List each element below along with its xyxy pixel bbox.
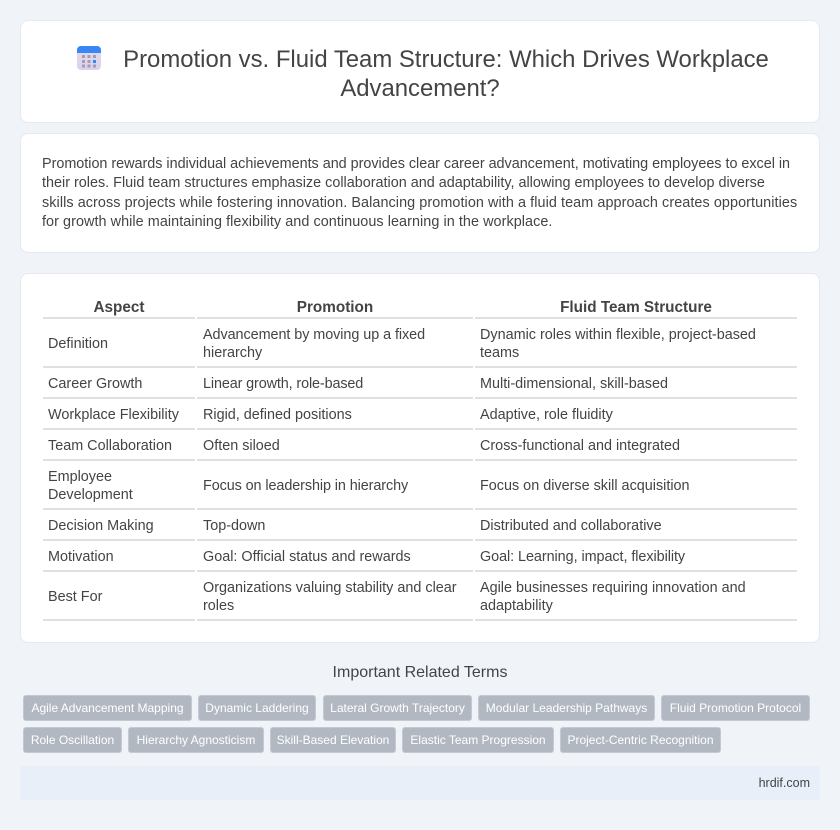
intro text: skills across projects while fostering innovation. Balancing promotion with a fluid team approach creates opportunities [42,195,797,211]
header card [20,20,820,123]
comparison table: Goal: Official status and rewards [203,549,411,565]
comparison table: Linear growth, role-based [203,376,363,392]
footer bar [20,766,820,800]
comparison table: teams [480,345,519,361]
comparison table: Advancement by moving up a fixed [203,327,425,343]
footer source: hrdif.com [759,776,810,790]
related term chips: Skill-Based Elevation [277,733,389,747]
intro text [42,156,797,230]
comparison table: Fluid Team Structure [560,299,712,316]
comparison table: Often siloed [203,438,280,454]
comparison table: Focus on diverse skill acquisition [480,478,690,494]
comparison table panel [20,273,820,643]
related terms heading: Important Related Terms [333,664,507,681]
comparison table: Agile businesses requiring innovation and [480,580,746,596]
related term chips: Lateral Growth Trajectory [330,701,465,715]
related term chips: Agile Advancement Mapping [31,701,184,715]
comparison table: Rigid, defined positions [203,407,352,423]
comparison table: Goal: Learning, impact, flexibility [480,549,685,565]
comparison table: Organizations valuing stability and clear [203,580,457,596]
title [123,46,769,102]
related term chips: Elastic Team Progression [410,733,546,747]
intro text: their roles. Fluid team structures emphasize collaboration and adaptability, allowing employees to develop diverse [42,175,765,191]
comparison table: Workplace Flexibility [48,407,179,423]
intro panel [20,133,820,253]
related term chips: Fluid Promotion Protocol [670,701,801,715]
comparison table: Definition [48,336,108,352]
comparison table: Team Collaboration [48,438,172,454]
related term chips: Modular Leadership Pathways [486,701,647,715]
comparison table: Dynamic roles within flexible, project-based [480,327,756,343]
comparison table: Distributed and collaborative [480,518,662,534]
comparison table: Cross-functional and integrated [480,438,680,454]
related term chips: Project-Centric Recognition [567,733,714,747]
comparison table: Motivation [48,549,114,565]
comparison table [43,299,797,621]
related term chips: Hierarchy Agnosticism [137,733,255,747]
comparison table: adaptability [480,598,553,614]
comparison table: Career Growth [48,376,142,392]
related term chips: Dynamic Laddering [205,701,309,715]
title: Advancement? [340,75,500,102]
comparison table: Adaptive, role fluidity [480,407,613,423]
comparison table: Development [48,487,133,503]
related term chips [23,695,810,753]
comparison table: roles [203,598,234,614]
comparison table: Top-down [203,518,265,534]
comparison table: Focus on leadership in hierarchy [203,478,408,494]
comparison table: Decision Making [48,518,154,534]
comparison table: Best For [48,589,102,605]
intro text: for growth while maintaining flexibility and continuous learning in the workplace. [42,214,552,230]
title: Promotion vs. Fluid Team Structure: Which Drives Workplace [123,46,769,73]
comparison table: Aspect [93,299,144,316]
comparison table: hierarchy [203,345,262,361]
intro text: Promotion rewards individual achievements and provides clear career advancement, motivating employees to excel in [42,156,790,172]
related term chips: Role Oscillation [31,733,114,747]
comparison table: Multi-dimensional, skill-based [480,376,668,392]
comparison table: Promotion [297,299,373,316]
icon: calendar [77,46,101,70]
comparison table: Employee [48,469,112,485]
